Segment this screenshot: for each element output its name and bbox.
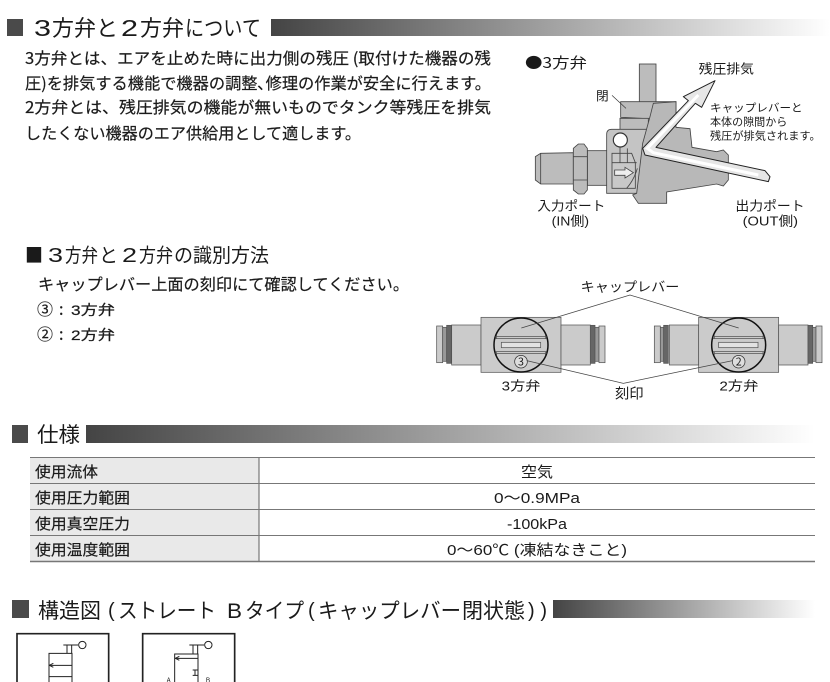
label: output port: [735, 196, 805, 229]
heading: about 3-way and 2-way valves: について: [185, 11, 261, 43]
specifications table: [30, 458, 815, 562]
heading: structure diagram: ストレート: [118, 595, 216, 625]
symbol: 2-way: [143, 634, 235, 682]
heading: structure diagram: キャップレバー: [318, 595, 461, 625]
sub-heading: identification method: 方弁: [139, 239, 173, 268]
sub-heading: identification method: 方弁: [65, 239, 98, 268]
identification text: 2方弁: [71, 327, 115, 343]
label: closed: [596, 86, 626, 108]
specifications table: 使用温度範囲: [35, 539, 130, 560]
intro text block: 3方弁とは、エアを止めた時に出力側の残圧 (取付けた機器の残: [25, 45, 491, 69]
label: output port: 出力ポート: [735, 196, 805, 215]
diagram: cap lever marking comparison: [437, 276, 822, 403]
specifications table: -100kPa: [507, 516, 568, 533]
heading: about 3-way and 2-way valves: [7, 11, 830, 43]
label: cap lever: キャップレバー: [581, 276, 679, 295]
specifications table: 使用流体: [35, 461, 98, 482]
heading: structure diagram: タイプ: [245, 595, 304, 625]
diagram: 3-way valve cross section: [525, 52, 821, 229]
sub-heading: identification method: と: [99, 239, 118, 268]
callout: exhaust gap note: 残圧が排気されます。: [710, 127, 821, 143]
icon label: 3-way valve: ●3方弁: [525, 52, 587, 73]
diagram: cap lever marking comparison: 3: [518, 355, 524, 370]
identification text: [37, 271, 409, 345]
heading: structure diagram: (: [108, 600, 115, 622]
sub-heading: identification method: 2: [122, 245, 137, 267]
specifications table: 0～0.9MPa: [494, 490, 581, 507]
label: 3-way: 3方弁: [502, 378, 540, 393]
intro text block: したくない機器のエア供給用として適します。: [25, 120, 361, 144]
heading: about 3-way and 2-way valves: 方弁: [52, 11, 96, 43]
heading: about 3-way and 2-way valves: と: [96, 11, 118, 43]
label: input port: (IN側): [552, 214, 589, 229]
label: 2-way: 2方弁: [719, 378, 758, 393]
label: residual exhaust: 残圧排気: [699, 58, 754, 77]
sub-heading: identification method: 3: [48, 245, 63, 267]
leader lines: [521, 295, 739, 383]
valve top view: 2-way: [654, 317, 822, 372]
identification text: 3方弁: [71, 302, 115, 318]
heading: structure diagram: 閉状態: [462, 595, 525, 625]
label: input port: 入力ポート: [537, 196, 605, 215]
symbol: 3-way: [17, 634, 109, 682]
callout: exhaust gap note: 本体の隙間から: [710, 113, 787, 129]
label: closed: 閉: [596, 86, 609, 105]
specifications table: 0～60℃ (凍結なきこと): [447, 542, 627, 559]
heading: about 3-way and 2-way valves: 2: [121, 15, 138, 41]
sub-heading: identification method: [25, 239, 269, 268]
specifications table: 空気: [521, 461, 553, 482]
callout: exhaust gap note: キャップレバーと: [710, 99, 803, 115]
arrow: residual pressure exhaust: [643, 81, 770, 182]
intro text block: [25, 45, 491, 144]
callout: exhaust gap note: [710, 99, 821, 143]
sub-heading: identification method: ■: [25, 239, 43, 268]
heading: structure diagram: 構造図: [38, 595, 101, 625]
heading: structure diagram: )): [528, 600, 547, 622]
specifications table: 使用圧力範囲: [35, 487, 130, 508]
identification text: キャップレバー上面の刻印にて確認してください。: [38, 271, 409, 295]
identification text: ③: [37, 296, 53, 320]
heading: structure diagram: [12, 595, 815, 625]
heading: structure diagram: (: [308, 600, 315, 622]
heading: specifications: [12, 419, 815, 449]
specifications table: 使用真空圧力: [35, 513, 130, 534]
heading: structure diagram: B: [227, 600, 242, 623]
heading: about 3-way and 2-way valves: 3: [34, 15, 51, 41]
intro text block: 2方弁とは、残圧排気の機能が無いものでタンク等残圧を排気: [25, 94, 491, 118]
valve top view: 3-way: [437, 317, 605, 372]
identification text: ②: [37, 321, 53, 345]
label: input port: [537, 196, 605, 229]
identification text: :: [59, 296, 63, 320]
heading: about 3-way and 2-way valves: 方弁: [140, 11, 184, 43]
identification text: :: [59, 321, 63, 345]
valve body: [535, 64, 728, 203]
heading: specifications: 仕様: [37, 419, 80, 449]
label: output port: (OUT側): [743, 214, 798, 229]
intro text block: 圧)を排気する機能で機器の調整､修理の作業が安全に行えます。: [25, 70, 491, 94]
symbol diagrams: [17, 634, 235, 682]
label: marking: 刻印: [615, 383, 644, 403]
diagram: cap lever marking comparison: 2: [736, 355, 742, 370]
sub-heading: identification method: の識別方法: [174, 239, 269, 268]
